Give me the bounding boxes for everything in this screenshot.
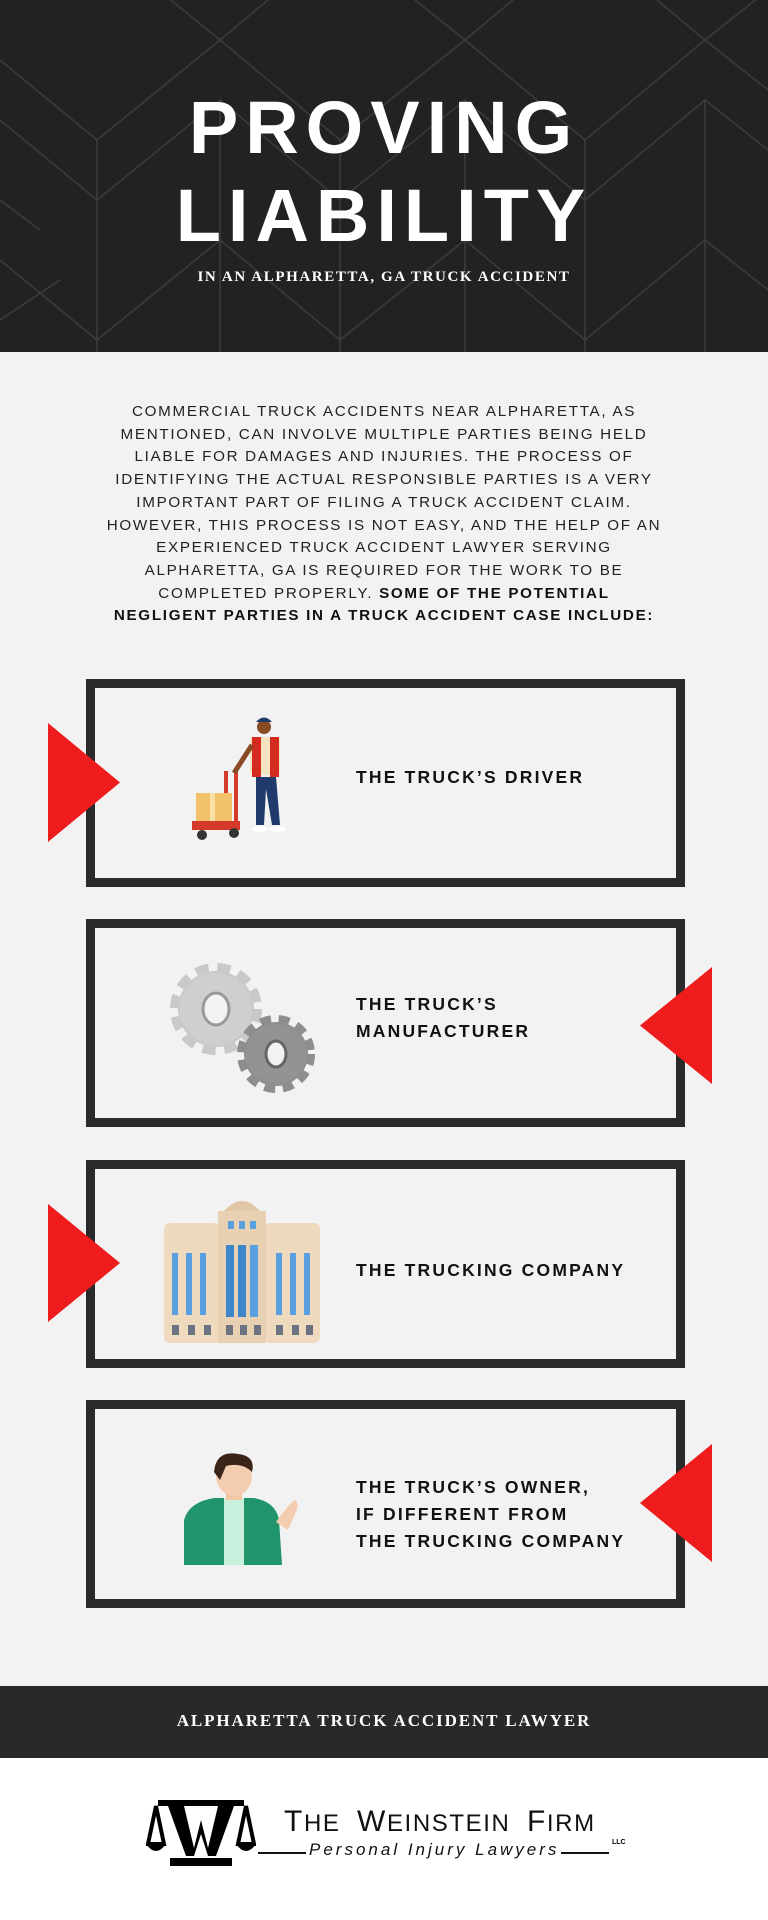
panel: truck's manufacturer (86, 919, 685, 1127)
intro paragraph: COMMERCIAL TRUCK ACCIDENTS NEAR ALPHARETTA, AS (132, 403, 636, 420)
label: THE TRUCKING COMPANY (356, 1260, 625, 1280)
footer text: ALPHARETTA TRUCK ACCIDENT LAWYER (177, 1711, 591, 1730)
arrow: left triangle 3 (48, 1204, 120, 1322)
title: PROVING (189, 86, 579, 169)
icon: scales W (146, 1800, 256, 1866)
intro paragraph: COMPLETED PROPERLY. SOME OF THE POTENTIAL (158, 585, 610, 602)
footer band (0, 1686, 768, 1758)
arrow: right triangle 2 (640, 967, 712, 1084)
icon: driver with hand truck (192, 718, 286, 840)
intro paragraph: HOWEVER, THIS PROCESS IS NOT EASY, AND THE HELP OF AN (107, 517, 661, 534)
arrow: right triangle 4 (640, 1444, 712, 1562)
panel: trucking company (86, 1160, 685, 1368)
title (176, 86, 592, 257)
label (356, 1477, 625, 1551)
icon: gears (170, 963, 315, 1093)
white footer (0, 1758, 768, 1920)
intro paragraph: EXPERIENCED TRUCK ACCIDENT LAWYER SERVING (156, 539, 612, 556)
icon: man in green jacket (184, 1453, 298, 1565)
label: THE TRUCKING COMPANY (356, 1531, 625, 1551)
title: LIABILITY (176, 174, 592, 257)
tagline: Personal Injury Lawyers (309, 1840, 559, 1859)
label: IF DIFFERENT FROM (356, 1504, 568, 1524)
label (356, 994, 530, 1041)
logo (146, 1800, 626, 1866)
intro paragraph: NEGLIGENT PARTIES IN A TRUCK ACCIDENT CASE INCLUDE: (114, 607, 654, 624)
icon: building (164, 1201, 320, 1343)
label: THE TRUCK’S DRIVER (356, 767, 584, 787)
panel: truck's driver (86, 679, 685, 887)
firm name: THE WEINSTEIN FIRM (284, 1805, 596, 1838)
subtitle: IN AN ALPHARETTA, GA TRUCK ACCIDENT (198, 269, 570, 285)
label: MANUFACTURER (356, 1021, 530, 1041)
header (0, 0, 768, 352)
intro paragraph (107, 403, 661, 624)
intro paragraph: IMPORTANT PART OF FILING A TRUCK ACCIDENT CLAIM. (136, 494, 632, 511)
arrow: left triangle 1 (48, 723, 120, 842)
label: THE TRUCK’S OWNER, (356, 1477, 590, 1497)
intro paragraph: IDENTIFYING THE ACTUAL RESPONSIBLE PARTIES IS A VERY (115, 471, 653, 488)
intro paragraph: MENTIONED, CAN INVOLVE MULTIPLE PARTIES BEING HELD (121, 426, 647, 443)
panel: truck's owner (86, 1400, 685, 1608)
intro paragraph: LIABLE FOR DAMAGES AND INJURIES. THE PROCESS OF (134, 448, 634, 465)
label: THE TRUCK’S (356, 994, 498, 1014)
intro paragraph: ALPHARETTA, GA IS REQUIRED FOR THE WORK TO BE (145, 562, 623, 579)
logo: LLC (612, 1839, 626, 1846)
